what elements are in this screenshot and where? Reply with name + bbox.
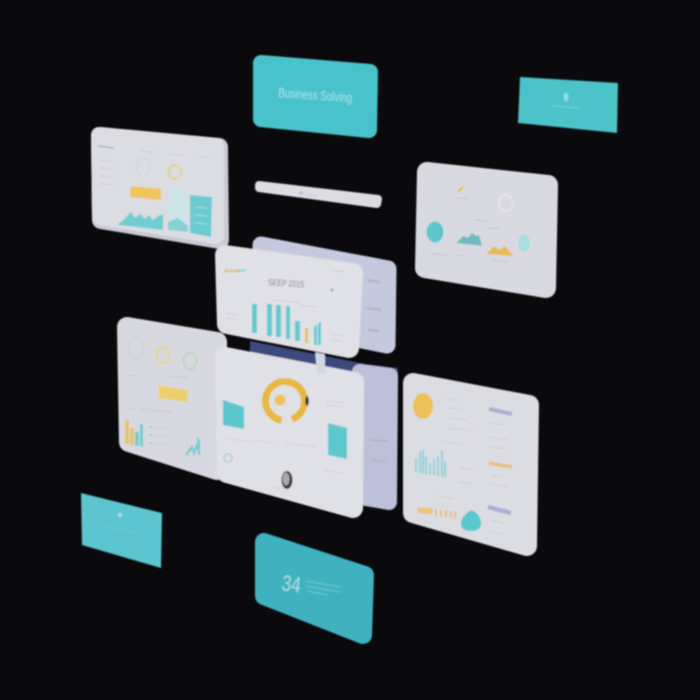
pill panel [259, 185, 378, 204]
small ring icon [224, 454, 232, 462]
dotted list [150, 426, 152, 444]
caption lines [306, 581, 340, 595]
panel: lower right dashboard [413, 383, 529, 546]
number mark: 34 [280, 570, 303, 598]
faint text lines [438, 398, 508, 534]
donut chart [262, 378, 309, 424]
panel: top left dashboard [98, 135, 220, 240]
teal circle [426, 222, 444, 242]
faint text lines [100, 151, 210, 185]
connector clip [315, 352, 325, 374]
teal card: bottom left [81, 493, 162, 568]
teal info card [223, 400, 244, 429]
yellow label [489, 463, 512, 467]
icon: small emblem [564, 92, 568, 102]
panel: centre bar chart [224, 255, 353, 348]
caption line [100, 525, 140, 533]
lens icon [282, 471, 292, 489]
bar chart [252, 304, 321, 345]
panel: lower left dashboard [125, 327, 217, 470]
pill text line [305, 194, 318, 196]
panel: back upper [261, 245, 388, 345]
yellow banner [130, 186, 161, 200]
connector band [250, 341, 398, 395]
teal info card [328, 423, 347, 459]
teal card: bottom [264, 542, 365, 635]
icon: yellow leaf [457, 185, 464, 193]
ring outline [499, 195, 513, 211]
sparkline icon [224, 270, 239, 272]
purple label [489, 409, 512, 414]
ring gauge: teal [136, 158, 150, 176]
chart title: SEEP 2015 [268, 277, 304, 290]
yellow circle [413, 393, 433, 419]
heading line [98, 146, 114, 148]
icon: pill emblem [299, 191, 303, 195]
teal bag icon [461, 510, 481, 531]
area chart [118, 212, 163, 230]
teal title card: top [261, 63, 370, 130]
faint text lines [225, 270, 345, 341]
heat strip [417, 507, 455, 519]
mini card: light teal [168, 188, 188, 232]
bar chart: teal spikes [416, 450, 445, 477]
mini card: teal [190, 195, 212, 237]
teal card: top right [518, 77, 618, 133]
teal shield [518, 234, 530, 252]
caption line [553, 106, 579, 108]
faint text lines [226, 400, 344, 489]
faint text lines [432, 198, 507, 262]
ring gauge 3 [184, 353, 196, 369]
panel: top right dashboard [425, 172, 548, 288]
small icon [330, 288, 334, 292]
icon: small emblem [118, 512, 122, 518]
ring gauge: yellow [168, 166, 182, 178]
yellow banner [158, 385, 188, 402]
growth chart [186, 438, 199, 455]
panel: back lower [360, 372, 390, 502]
faint text lines [126, 375, 188, 412]
bar chart [125, 420, 143, 447]
teal area chart [457, 233, 482, 246]
yellow area chart [487, 246, 514, 256]
panel: centre donut dashboard [223, 352, 354, 508]
purple label [488, 507, 511, 513]
side panel lines [367, 280, 381, 331]
donut accent [305, 396, 309, 406]
title text: Business Solving [278, 85, 353, 105]
side panel lines [370, 440, 388, 462]
ring gauge 2 [156, 347, 170, 363]
ring gauge 1 [129, 338, 143, 360]
